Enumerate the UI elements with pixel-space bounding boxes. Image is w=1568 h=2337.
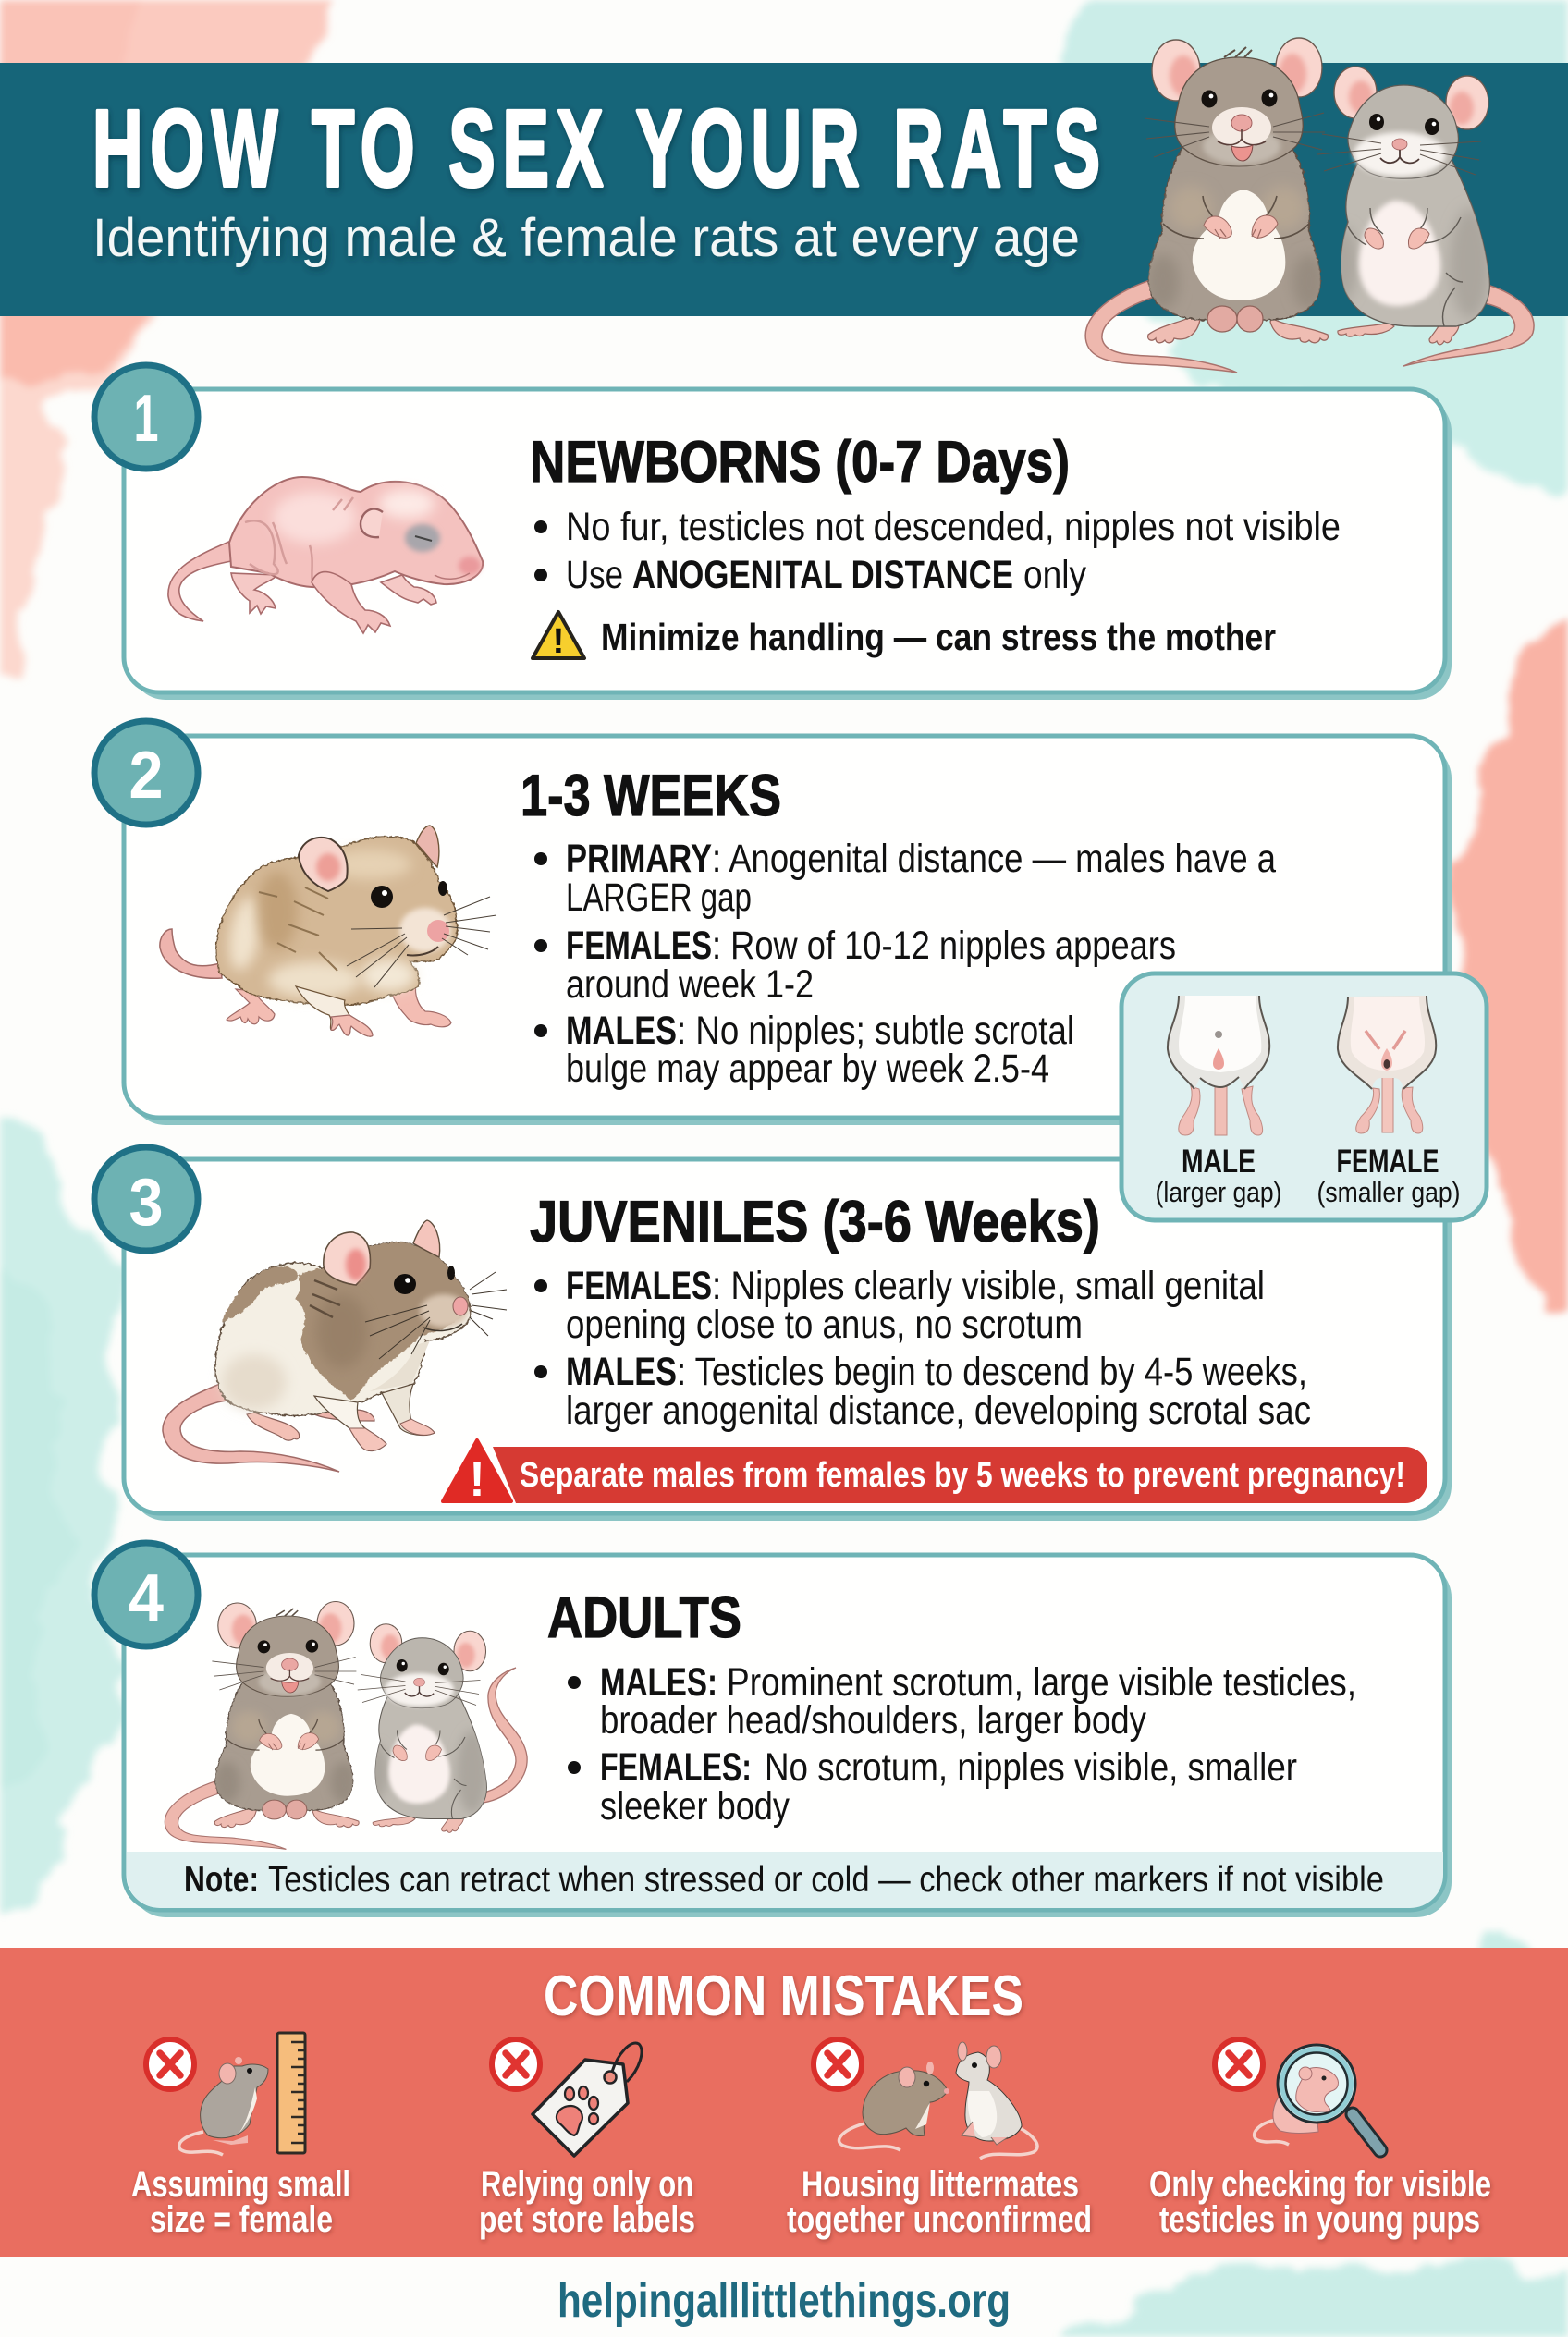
bullet list: FEMALES [566,924,712,968]
heading: JUVENILES (3-6 Weeks) [530,1190,1100,1254]
icon: two rats [839,2042,1037,2159]
card frame [124,736,1452,1125]
warning note: Minimize handling — can stress the mother [601,616,1276,658]
icon: magnifier over pup [1255,2045,1380,2150]
label: Assuming small [131,2164,350,2205]
heading: COMMON MISTAKES [544,1964,1023,2028]
male label [1156,1144,1281,1208]
header banner [0,63,1568,316]
label: Housing littermates [802,2164,1079,2205]
bullet list: MALES [566,1009,677,1053]
bullet list: PRIMARY [566,837,712,881]
card frame [124,389,1452,700]
note strip: Note: [184,1860,259,1900]
mistake 1: size [131,2033,350,2240]
icon: X mark [146,2039,194,2089]
icon: X mark [1215,2039,1263,2089]
bullet list: FEMALES [566,1264,712,1308]
male anatomy [1168,996,1269,1135]
illustration: young tan rat [160,826,496,1036]
icon: pet store tag [533,2043,642,2156]
inset: anogenital comparison [1121,973,1487,1220]
panel: juveniles [94,1147,1452,1521]
heading: NEWBORNS (0-7 Days) [530,430,1070,495]
bullet list: No fur, testicles not descended, nipples not visible [566,505,1341,549]
label: Relying only on [481,2164,693,2205]
heading: ADULTS [547,1585,741,1650]
label: pet store labels [479,2199,695,2240]
bullet list: around week 1-2 [566,962,814,1007]
bullet list [534,1264,1311,1433]
bullet list: : Nipples clearly visible, small genital [712,1264,1265,1308]
red warning banner: ! [469,1453,485,1507]
step badge 1: 1 [133,382,159,456]
panel: newborns [94,365,1452,700]
female label: (smaller gap) [1317,1176,1461,1208]
bullet list: : No nipples; subtle scrotal [677,1009,1074,1053]
panel: adults [94,1543,1452,1917]
label: together unconfirmed [787,2199,1092,2240]
step badge 3 [94,1147,198,1251]
step badge 3: 3 [129,1166,163,1240]
note strip [127,1852,1443,1908]
bullet list: : Row of 10-12 nipples appears [712,924,1176,968]
warning note: ! [553,622,564,661]
red warning banner [443,1440,1427,1507]
illustration: newborn rat [168,477,483,633]
heading: 1-3 WEEKS [521,764,781,828]
bullet list [534,837,1276,1091]
bullet list: only [1023,553,1086,597]
icon: small rat and ruler [179,2033,305,2155]
title: HOW TO SEX YOUR RATS [92,87,1100,209]
label [1149,2164,1491,2240]
bullet list: ANOGENITAL DISTANCE [632,553,1013,597]
icon: X mark [814,2039,862,2089]
panel: common mistakes [0,1948,1568,2257]
label: size = female [150,2199,333,2240]
bullet list: LARGER gap [566,875,752,920]
label [787,2164,1092,2240]
step badge 4: 4 [129,1561,164,1635]
label [479,2164,695,2240]
card frame [124,1159,1452,1521]
step badge 4 [94,1543,198,1646]
step badge 1 [94,365,198,469]
male label: MALE [1182,1144,1256,1180]
mistake 2: labels [479,2039,695,2240]
bullet list: Prominent scrotum, large visible testicles, [727,1660,1356,1705]
card frame [124,1555,1452,1917]
male label: (larger gap) [1156,1176,1281,1208]
note strip: Testicles can retract when stressed or cold — check other markers if not visible [268,1860,1384,1900]
panel: 1-3 weeks [94,721,1452,1125]
bullet list: No scrotum, nipples visible, smaller [765,1745,1297,1790]
illustration: juvenile brown and white rat [163,1220,507,1472]
bullet list: broader head/shoulders, larger body [600,1698,1146,1743]
footer website: helpingalllittlethings.org [557,2274,1011,2328]
red warning banner: Separate males from females by 5 weeks to prevent pregnancy! [520,1456,1405,1495]
label [131,2164,350,2240]
mistake 4: pups [1149,2039,1491,2240]
female anatomy [1338,996,1436,1133]
step badge 2: 2 [129,739,163,813]
bullet list: bulge may appear by week 2.5-4 [566,1046,1049,1091]
bullet list: sleeker body [600,1784,790,1829]
bullet list: larger anogenital distance, developing scrotal sac [566,1389,1311,1433]
bullet list: FEMALES: [600,1745,752,1790]
bullet list: opening close to anus, no scrotum [566,1303,1083,1347]
bullet list [568,1660,1356,1829]
bullet list: Use [566,553,623,597]
label: testicles in young pups [1159,2199,1480,2240]
bullet list: : Anogenital distance — males have a [712,837,1276,881]
mistake 3: littermates [787,2039,1092,2240]
bullet list: MALES [566,1350,677,1394]
female label [1317,1144,1461,1208]
bullet list: : Testicles begin to descend by 4-5 weeks, [677,1350,1307,1394]
bullet list [534,505,1341,597]
female label: FEMALE [1337,1144,1439,1180]
illustration: adult male and female rats [165,1602,527,1849]
icon: X mark [492,2039,540,2089]
bullet list: MALES: [600,1660,717,1705]
step badge 2 [94,721,198,825]
subtitle: Identifying male & female rats at every age [92,208,1080,268]
illustration: male and female rats in header [1085,38,1534,373]
